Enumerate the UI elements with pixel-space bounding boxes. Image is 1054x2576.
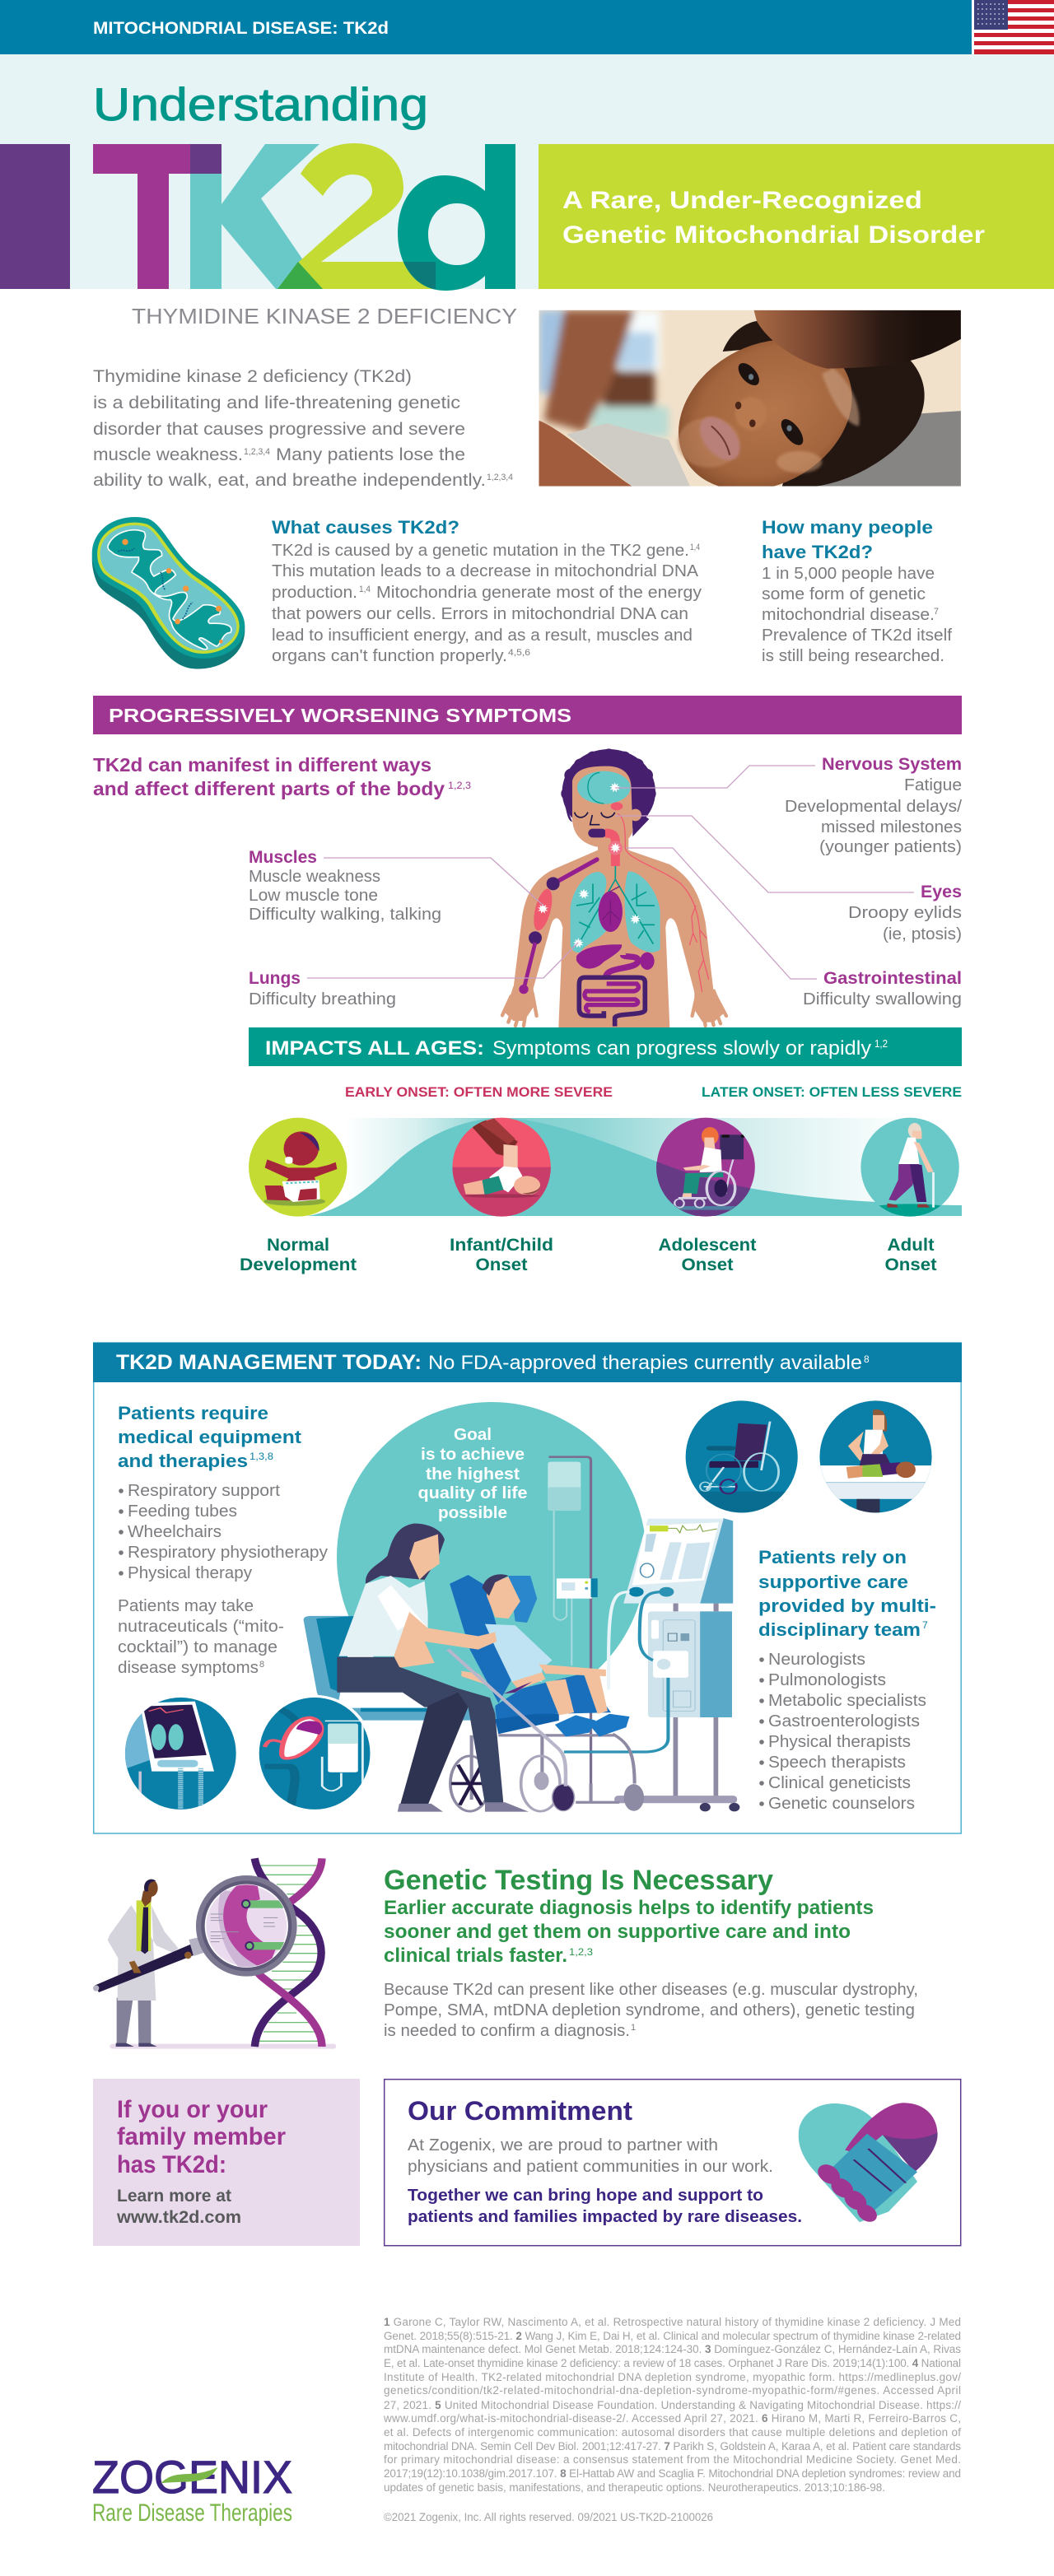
what causes text: 1,4: [359, 585, 371, 594]
banner: impacts all ages: IMPACTS ALL AGES:: [265, 1037, 484, 1060]
label: normal development: [240, 1236, 357, 1274]
panel: tagline: Genetic Mitochondrial Disorder: [562, 221, 985, 249]
note: nutraceuticals: cocktail”) to manage: [118, 1638, 277, 1656]
label: Eyes: Eyes: [921, 883, 962, 901]
what causes text: 1,4: [690, 543, 700, 552]
banner: symptoms: PROGRESSIVELY WORSENING SYMPTOMS: [109, 705, 571, 726]
body text: [384, 1981, 918, 2040]
how many people text: is still being researched.: [762, 647, 944, 665]
icon: lung monitor circle: [123, 1698, 236, 1812]
label: Eyes: (ie, ptosis): [883, 925, 962, 943]
subheading: sooner and get them on supportive care and into: [384, 1921, 851, 1943]
heading: patients require: medical equipment: [118, 1427, 302, 1447]
heart: [599, 892, 623, 932]
diagram: human body: [502, 748, 726, 1027]
label: normal development: Normal: [267, 1236, 329, 1255]
list: equipment: Respiratory support: [128, 1482, 280, 1500]
icon: adolescent onset: [656, 1118, 755, 1217]
muscles: [556, 859, 597, 883]
nerves: [618, 813, 709, 992]
label: Nervous System: [785, 755, 962, 856]
hero light background: [0, 54, 1054, 289]
goal text: [418, 1426, 527, 1522]
left column: equipment text: [118, 1403, 328, 1677]
hair: [561, 748, 656, 836]
heading: patients rely: supportive care: [758, 1572, 908, 1592]
banner text: TK2D MANAGEMENT TODAY:: [116, 1351, 422, 1374]
panel: our commitment: At Zogenix, we are proud to partner with: [408, 2136, 718, 2154]
photo: parent kissing baby: [539, 310, 961, 487]
monitor: [700, 1518, 733, 1604]
throat: [605, 833, 615, 866]
label: Nervous System: (younger patients): [819, 838, 962, 856]
IV pole and bag: [549, 1457, 591, 1802]
icon: adult onset: [860, 1118, 959, 1219]
list: care team: Genetic counselors: [768, 1795, 915, 1813]
banner: symptoms: [93, 696, 962, 734]
body text: Because TK2d can present like other diseases (e.g. muscular dystrophy,: [384, 1981, 918, 1999]
intro text: Many patients lose the: [276, 445, 465, 464]
note: nutraceuticals: disease symptoms: [118, 1659, 259, 1677]
how many people text: 1 in 5,000 people have: [762, 565, 935, 583]
label: adult onset: [884, 1236, 937, 1274]
note: nutraceuticals: nutraceuticals (“mito-: [118, 1618, 284, 1636]
label: normal development: Development: [240, 1255, 357, 1274]
icon: scientist with magnifier and DNA: [93, 1858, 336, 2049]
label: Nervous System: Nervous System: [822, 755, 962, 774]
banner: impacts all ages: [249, 1027, 962, 1066]
label: Muscles: Low muscle tone: [249, 887, 378, 905]
icon: mitochondrion: [92, 517, 245, 669]
label: later onset: LATER ONSET: OFTEN LESS SEVERE: [702, 1085, 962, 1100]
teal goal circle: [337, 1402, 646, 1712]
list: care team: [759, 1651, 926, 1813]
brain: [577, 771, 631, 804]
lens: [196, 1875, 297, 1977]
panel: learn more: [93, 2079, 360, 2246]
title: TK2d letters: [93, 143, 515, 291]
heading: patients require: and therapies: [118, 1451, 248, 1471]
panel: learn more: family member: [117, 2123, 286, 2150]
banner text: No FDA-approved therapies currently available: [428, 1352, 862, 1374]
symptoms intro heading: and affect different parts of the body: [93, 778, 445, 799]
icon: US flag: [972, 0, 1054, 54]
label: Nervous System: missed milestones: [821, 818, 962, 836]
logo: Zogenix: Rare Disease Therapies: [92, 2499, 292, 2527]
label: Muscles: [249, 848, 441, 924]
goal text: possible: [438, 1504, 507, 1522]
label: Nervous System: Developmental delays/: [785, 798, 962, 816]
title: Understanding: Understanding: [93, 78, 428, 130]
caregiver: [366, 1524, 445, 1584]
subheading: 1,2,3: [569, 1946, 593, 1958]
label: Muscles: Muscle weakness: [249, 868, 380, 886]
label: Eyes: Droopy eylids: [848, 904, 962, 922]
references: 1 Garone C, Taylor RW, Nascimento A, et al. Retrospective natural history of thymidine kinase 2 deficiency. J Med: [384, 2316, 961, 2328]
label: infant child onset: [450, 1236, 553, 1274]
header label: MITOCHONDRIAL DISEASE: TK2d: [93, 19, 389, 38]
banner text: 8: [864, 1353, 870, 1365]
bar: [448, 1650, 566, 1786]
label: Muscles: Difficulty walking, talking: [249, 906, 441, 924]
banner: impacts all ages: 1,2: [874, 1037, 888, 1050]
icon: normal development baby: [249, 1118, 347, 1217]
subtitle: THYMIDINE KINASE 2 DEFICIENCY: [132, 304, 517, 328]
illustration: caregiver, patient and equipment: [304, 1457, 739, 1812]
heading: patients rely: disciplinary team: [758, 1619, 921, 1640]
panel: our commitment: Our Commitment: [408, 2096, 632, 2126]
body text: 1: [631, 2023, 636, 2033]
bench: [304, 1616, 356, 1708]
intro text: Thymidine kinase 2 deficiency (TK2d): [93, 367, 412, 386]
face: [575, 813, 615, 825]
list: equipment: Wheelchairs: [128, 1523, 222, 1541]
what causes text: organs can't function properly.: [272, 647, 507, 665]
heading: genetic testing: Genetic Testing Is Necessary: [384, 1865, 773, 1896]
list: care team: Metabolic specialists: [768, 1692, 926, 1710]
references: E, et al. Late-onset thymidine kinase 2 deficiency: a review of 18 cases. Orphanet J Rare Dis. 2019;14(1):100. 4 National: [384, 2357, 961, 2369]
panel: our commitment: [385, 2080, 961, 2246]
label: adolescent onset: Adolescent: [659, 1236, 756, 1255]
references: 27, 2021. 5 United Mitochondrial Disease Foundation. Understanding & Navigating Mitochondrial Disease. https://: [384, 2399, 961, 2411]
how many people text: Prevalence of TK2d itself: [762, 627, 952, 645]
label: Muscles: Muscles: [249, 848, 317, 867]
decorative purple block: [0, 144, 70, 289]
banner: impacts all ages: Symptoms can progress slowly or rapidly: [492, 1037, 871, 1060]
heading: patients rely: provided by multi-: [758, 1595, 936, 1616]
intro text: is a debilitating and life-threatening genetic: [93, 394, 460, 412]
goal text: quality of life: [418, 1484, 527, 1502]
label: Gastrointestinal: Gastrointestinal: [823, 969, 962, 988]
heading: patients require: [118, 1403, 302, 1471]
label: Nervous System: Fatigue: [904, 776, 962, 794]
references: [383, 2316, 961, 2494]
intro text: 1,2,3,4: [487, 473, 513, 482]
what causes text: lead to insufficient energy, and as a result, muscles and: [272, 627, 693, 645]
chart: onset progression curve: [307, 1118, 962, 1216]
panel: our commitment: patients and families impacted by rare diseases.: [408, 2208, 802, 2226]
label: adult onset: Adult: [888, 1236, 934, 1255]
heading: patients require: Patients require: [118, 1403, 268, 1423]
label: adult onset: Onset: [884, 1255, 937, 1274]
intro text: 1,2,3,4: [244, 447, 270, 457]
references: 2017;19(12):10.1038/gim.2017.107. 8 El-Hattab AW and Scaglia F. Mitochondrial DNA depletion syndromes: review and: [384, 2467, 961, 2480]
intro text: disorder that causes progressive and severe: [93, 420, 465, 439]
references: www.umdf.org/what-is-mitochondrial-disease-2/. Accessed April 27, 2021. 6 Hirano M, Marti R, Ferreiro-Barros C,: [383, 2412, 961, 2425]
icon: wheelchair circle: [686, 1400, 802, 1514]
panel: our commitment: physicians and patient communities in our work.: [408, 2158, 773, 2176]
what causes text: production.: [272, 584, 357, 602]
panel: tagline: A Rare, Under-Recognized: [562, 187, 922, 214]
section: genetic testing: [384, 1865, 918, 2040]
panel: management: [93, 1343, 962, 1833]
references: Institute of Health. TK2-related mitochondrial DNA depletion syndrome, myopathic form. https://medlineplus.gov/: [384, 2371, 961, 2383]
scientist: [117, 1998, 133, 2044]
subheading: clinical trials faster.: [384, 1945, 567, 1967]
what causes text: [272, 517, 702, 665]
what causes text: 4,5,6: [508, 648, 530, 658]
symptoms intro heading: TK2d can manifest in different ways: [93, 754, 431, 776]
list: care team: Clinical geneticists: [768, 1774, 911, 1792]
heading: how many: How many people: [762, 517, 933, 538]
body text: Pompe, SMA, mtDNA depletion syndrome, and others), genetic testing: [384, 2001, 915, 2019]
heading: patients rely: 7: [922, 1619, 928, 1631]
panel: tagline: [539, 144, 1054, 289]
references: genetics/condition/tk2-related-mitochondrial-dna-depletion-syndrome-myopathic-form/#genes. Accessed April: [384, 2384, 961, 2397]
right column: care team text: [758, 1547, 936, 1813]
logo: Zogenix: ZOGENIX: [92, 2451, 292, 2503]
list: care team: Neurologists: [768, 1651, 865, 1669]
label: Eyes: [848, 883, 962, 943]
references: mtDNA maintenance defect. Mol Genet Metab. 2018;124:124-30. 3 Domínguez-González C, Hernández-Laín A, Rivas: [384, 2343, 961, 2355]
panel: learn more: If you or your: [117, 2096, 268, 2123]
how many people text: [762, 517, 952, 665]
list: care team: Pulmonologists: [768, 1671, 886, 1689]
label: adolescent onset: [659, 1236, 756, 1274]
icon: infant onset: [452, 1118, 551, 1217]
intro text: ability to walk, eat, and breathe independently.: [93, 471, 486, 490]
child seat: [450, 1575, 512, 1703]
digestive: [576, 944, 622, 969]
note: nutraceuticals: 8: [259, 1660, 264, 1670]
machine: [648, 1611, 732, 1717]
goal text: is to achieve: [421, 1446, 525, 1464]
label: Lungs: Lungs: [249, 969, 301, 988]
banner text: [116, 1351, 870, 1374]
list: equipment: Physical therapy: [128, 1564, 252, 1582]
symptoms intro heading: [93, 754, 471, 799]
wheelchair frame: [472, 1734, 635, 1802]
tubes: [609, 1592, 629, 1689]
label: infant child onset: Onset: [476, 1255, 528, 1274]
list: equipment: Feeding tubes: [128, 1502, 237, 1521]
strands: [254, 1858, 321, 2047]
panel: learn more: has TK2d:: [117, 2151, 226, 2178]
head: [572, 766, 632, 847]
panel: learn more: www.tk2d.com: [116, 2208, 241, 2227]
rungs: [259, 1866, 324, 2041]
label: Gastrointestinal: Difficulty swallowing: [803, 990, 962, 1009]
references: mitochondrial DNA. Semin Cell Dev Biol. 2001;12:417-27. 7 Parikh S, Goldstein A, Karaa A, et al. Patient care standards: [384, 2440, 961, 2453]
body text: is needed to confirm a diagnosis.: [384, 2022, 630, 2040]
icon: physical therapy circle: [816, 1400, 938, 1516]
label: adolescent onset: Onset: [682, 1255, 734, 1274]
torso and arms: [513, 831, 714, 1027]
list: equipment: [119, 1482, 328, 1582]
references: et al. Defects of intergenomic communication: autosomal disorders that cause multiple deletions and depletion of: [384, 2426, 961, 2439]
subheading: Earlier accurate diagnosis helps to identify patients: [384, 1897, 874, 1919]
header bar: [0, 0, 1054, 54]
subheading: [384, 1897, 874, 1967]
references: for primary mitochondrial disease: a consensus statement from the Mitochondrial Medicine Society. Genet Med.: [384, 2453, 961, 2466]
icon: feeding tube circle: [256, 1695, 374, 1812]
how many people text: have TK2d?: [762, 542, 873, 562]
what causes text: that powers our cells. Errors in mitochondrial DNA can: [272, 605, 688, 623]
references: Genet. 2018;55(8):515-21. 2 Wang J, Kim E, Dai H, et al. Clinical and molecular spectrum of thymidine kinase 2-related: [384, 2330, 961, 2342]
how many people text: mitochondrial disease.: [762, 606, 935, 624]
intro text: muscle weakness.: [93, 445, 243, 464]
how many people text: some form of genetic: [762, 585, 926, 603]
icon: handshake heart: [799, 2103, 938, 2223]
note: nutraceuticals: Patients may take: [118, 1597, 254, 1615]
note: nutraceuticals: [118, 1597, 284, 1677]
what causes text: TK2d is caused by a genetic mutation in the TK2 gene.: [272, 542, 689, 560]
heading: patients require: 1,3,8: [250, 1451, 273, 1462]
panel: learn more: Learn more at: [117, 2187, 231, 2206]
symptoms intro heading: 1,2,3: [448, 780, 471, 791]
label: early onset: EARLY ONSET: OFTEN MORE SEVERE: [345, 1085, 613, 1100]
heading: patients rely: Patients rely on: [758, 1547, 907, 1567]
lungs: [571, 872, 607, 953]
intro text: [93, 367, 513, 490]
what causes text: This mutation leads to a decrease in mitochondrial DNA: [272, 562, 699, 580]
heading: what causes: What causes TK2d?: [272, 517, 459, 538]
panel: our commitment: Together we can bring hope and support to: [408, 2187, 763, 2205]
goal text: Goal: [454, 1426, 492, 1444]
label: Gastrointestinal: [803, 969, 962, 1009]
banner: management today: [93, 1343, 962, 1382]
list: care team: Gastroenterologists: [768, 1712, 920, 1731]
list: equipment: Respiratory physiotherapy: [128, 1544, 328, 1562]
references: updates of genetic basis, manifestations, and therapeutic options. Neurotherapeutics. 2013;10:186-98.: [384, 2481, 885, 2494]
logo: Zogenix: [92, 2451, 292, 2527]
what causes text: Mitochondria generate most of the energy: [376, 584, 702, 602]
label: infant child onset: Infant/Child: [450, 1236, 553, 1255]
label: Lungs: [249, 969, 396, 1009]
goal text: the highest: [426, 1465, 520, 1484]
label: Lungs: Difficulty breathing: [249, 990, 396, 1009]
list: care team: Speech therapists: [768, 1754, 906, 1772]
child: [487, 1577, 520, 1619]
leader lines: [307, 766, 914, 979]
heading: patients rely: [758, 1547, 936, 1640]
copyright: ©2021 Zogenix, Inc. All rights reserved. 09/2021 US-TK2D-2100026: [384, 2511, 713, 2523]
list: care team: Physical therapists: [768, 1733, 911, 1751]
handle: [95, 1945, 194, 1992]
how many people text: 7: [934, 607, 939, 617]
